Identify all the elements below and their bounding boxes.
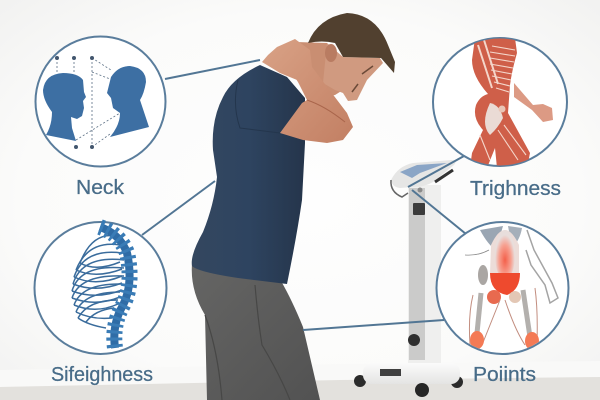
label: Neck: Neck bbox=[76, 177, 125, 199]
hair bbox=[308, 13, 395, 73]
face bbox=[323, 43, 383, 101]
shirt bbox=[192, 65, 305, 284]
arm crease bbox=[307, 100, 345, 122]
baseboard bbox=[0, 361, 600, 387]
spine circle bbox=[34, 222, 166, 354]
scale machine bbox=[354, 160, 463, 397]
sleeve seam bbox=[235, 80, 280, 133]
panel: points bbox=[436, 222, 568, 386]
ear bbox=[325, 44, 337, 62]
machine column bbox=[408, 185, 441, 367]
illustration: muscle figure bbox=[470, 38, 553, 168]
icon: head silhouettes bbox=[43, 56, 149, 149]
illustration: pelvis and legs bbox=[465, 226, 558, 350]
label: Trighness: Trighness bbox=[470, 178, 561, 200]
panel: spine bbox=[34, 222, 166, 386]
neck circle bbox=[36, 36, 166, 166]
label: Poiints: Poiints bbox=[473, 364, 536, 386]
icon: rib cage and spine bbox=[72, 227, 130, 348]
machine base bbox=[354, 363, 463, 397]
muscle circle bbox=[433, 38, 567, 166]
pants bbox=[192, 264, 320, 400]
label: Sifeighness: Sifeighness bbox=[51, 364, 153, 386]
arm and hand bbox=[262, 39, 353, 143]
neck bbox=[290, 42, 343, 100]
points circle bbox=[436, 222, 568, 354]
connector lines bbox=[142, 60, 466, 330]
panel: neck bbox=[36, 36, 166, 199]
person bbox=[192, 13, 395, 400]
pants folds bbox=[205, 285, 290, 400]
panel: muscles bbox=[433, 38, 567, 200]
floor bbox=[0, 377, 600, 400]
machine head with screen bbox=[391, 160, 456, 197]
eye and brow bbox=[352, 66, 373, 92]
